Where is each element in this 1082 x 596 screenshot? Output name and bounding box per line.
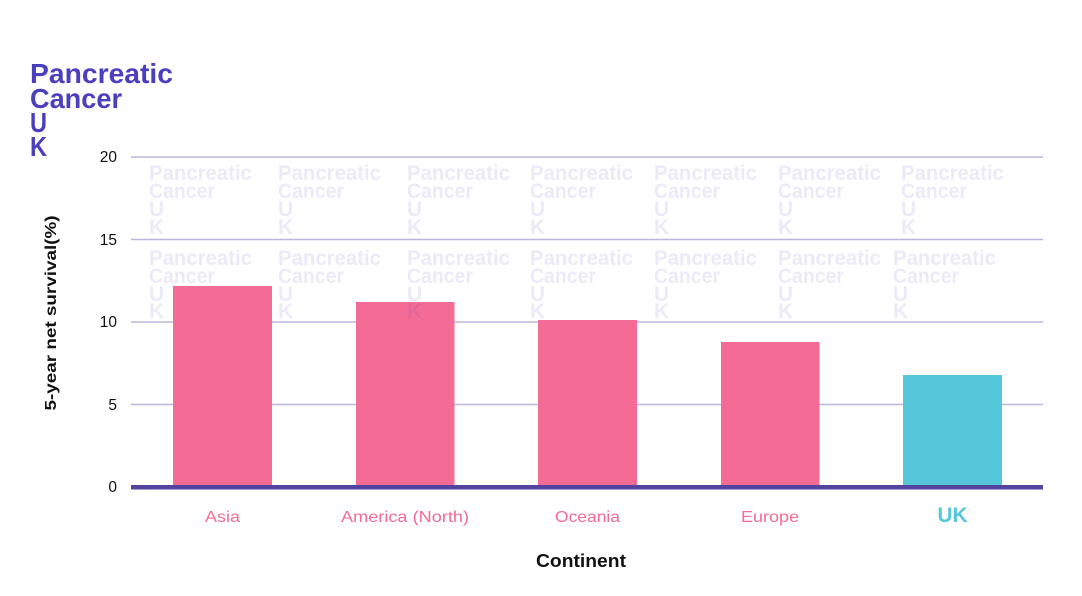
watermark row 1: Cancer [654,180,720,203]
x axis category labels: Europe [741,509,799,526]
bar chart [173,286,1002,486]
bar: Oceania [538,320,637,486]
watermark row 2: K [407,300,422,323]
x axis category labels: Oceania [555,509,620,526]
watermark row 2: K [778,300,793,323]
watermark row 2: U [149,283,164,306]
watermark row 1: K [778,216,793,239]
logo: U [30,107,47,138]
watermark row 2: Cancer [778,265,844,288]
watermark row 2: Cancer [407,265,473,288]
watermark row 2: U [893,283,908,306]
watermark row 1: Pancreatic [149,162,252,185]
watermark row 1: U [901,198,916,221]
y axis gridlines [131,157,1043,404]
watermark row 1: Pancreatic [654,162,757,185]
watermark row 2: U [530,283,545,306]
watermark row 2: U [407,283,422,306]
y axis title: 5-year net survival(%) [43,216,60,410]
watermark row 2: Cancer [530,265,596,288]
watermark row 1: Pancreatic [407,162,510,185]
watermark row 2: Cancer [654,265,720,288]
watermark row 1: K [149,216,164,239]
y axis tick labels [100,149,117,496]
x axis category labels: Asia [205,509,240,526]
y axis tick labels: 20 [100,149,117,166]
y axis tick labels: 10 [100,314,117,331]
bar: America (North) [356,302,454,486]
watermark row 1: Cancer [530,180,596,203]
watermark row 1: Pancreatic [778,162,881,185]
watermark row 1: K [530,216,545,239]
watermark row 2: Pancreatic [407,247,510,270]
logo [30,58,173,162]
watermark row 2: U [778,283,793,306]
watermark row 1: Pancreatic [278,162,381,185]
watermark row 1: Cancer [778,180,844,203]
x axis category labels [205,509,799,526]
watermark row 1: Cancer [278,180,344,203]
watermark row 2: Cancer [893,265,959,288]
watermark row 2: K [278,300,293,323]
watermark row 2: Pancreatic [654,247,757,270]
x axis category labels: America (North) [341,509,469,526]
bar: UK [903,375,1002,486]
watermark row 1: Cancer [149,180,215,203]
watermark row 1: Cancer [407,180,473,203]
watermark row 1: U [778,198,793,221]
watermark row 2: K [893,300,908,323]
x axis line [131,485,1043,490]
watermark row 2: Pancreatic [149,247,252,270]
bar: Europe [721,342,820,486]
watermark row 1 [149,162,1004,239]
watermark row 2: Cancer [149,265,215,288]
watermark row 1: U [407,198,422,221]
y axis tick labels: 5 [108,397,117,414]
watermark row 2: K [654,300,669,323]
watermark row 2: Pancreatic [893,247,996,270]
watermark row 2: U [278,283,293,306]
watermark row 1: Pancreatic [530,162,633,185]
watermark row 1: U [654,198,669,221]
watermark row 2: Pancreatic [278,247,381,270]
watermark row 2: Cancer [278,265,344,288]
y axis tick labels: 15 [100,232,117,249]
watermark row 2: K [149,300,164,323]
highlighted category label: UK: UK [938,504,968,527]
watermark row 1: Cancer [901,180,967,203]
watermark row 2: Pancreatic [778,247,881,270]
watermark row 1: U [530,198,545,221]
x axis title: Continent [536,551,626,571]
logo: Cancer [30,83,122,114]
watermark row 1: K [278,216,293,239]
watermark row 1: Pancreatic [901,162,1004,185]
watermark row 1: U [278,198,293,221]
watermark row 2: U [654,283,669,306]
watermark row 2: K [530,300,545,323]
watermark row 2 [149,247,996,323]
watermark row 1: K [654,216,669,239]
watermark row 1: K [901,216,916,239]
logo: K [30,131,47,162]
y axis tick labels: 0 [108,479,117,496]
watermark row 2: Pancreatic [530,247,633,270]
bar: Asia [173,286,272,486]
watermark row 1: U [149,198,164,221]
watermark row 1: K [407,216,422,239]
logo: Pancreatic [30,58,173,89]
